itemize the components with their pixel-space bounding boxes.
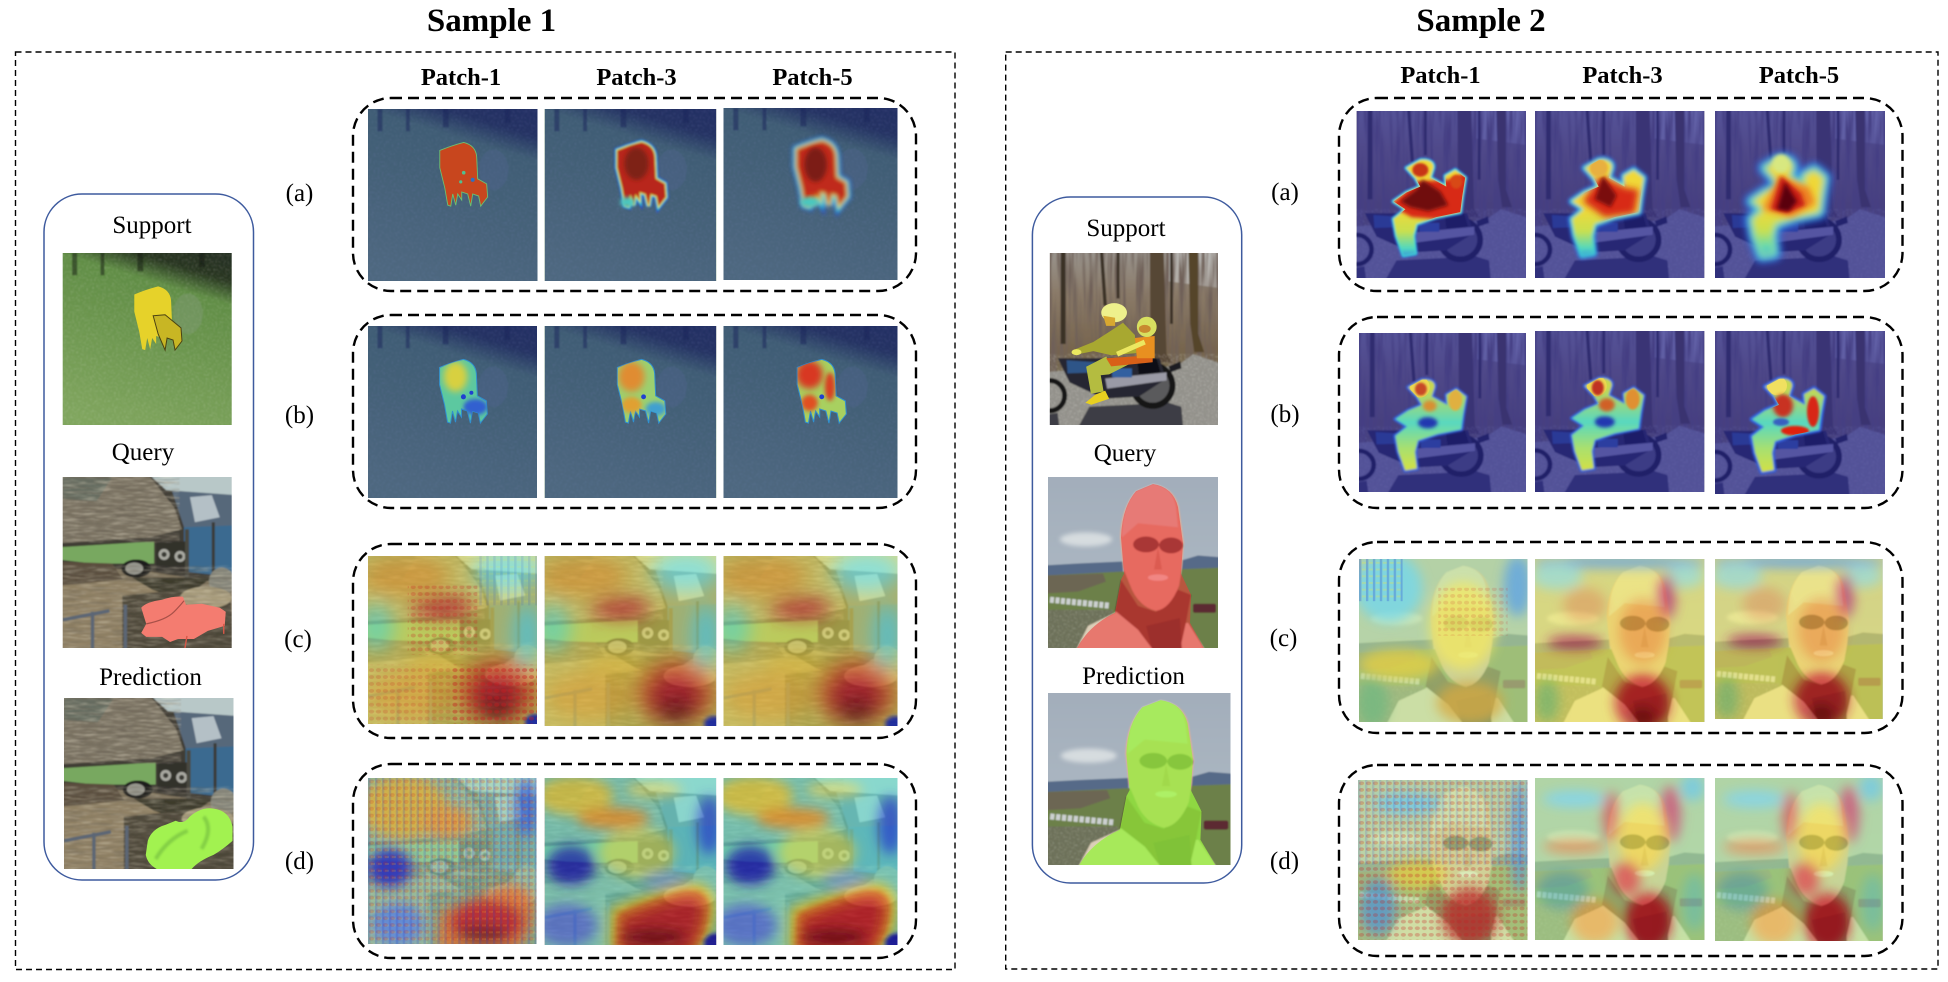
column headings: Sample 1 patches [421,64,853,91]
title: Sample 2: Sample 2 [1416,3,1546,39]
heatmap: b patch-5 [1715,331,1885,494]
row (d): Sample 1 heatmaps [353,764,916,958]
heatmap: d patch-1 [368,778,536,944]
column headings: Sample 1 patches: Patch-3 [596,64,677,91]
label: Prediction: Prediction [1082,663,1185,690]
image: support sheep [62,253,232,425]
label: Query: Query [112,439,175,466]
row label (a): (a) [1271,179,1299,206]
heatmap: d patch-1 [1358,780,1528,940]
row label (c): (c) [284,626,312,653]
label: Support: Support [1086,215,1166,242]
column headings: Sample 1 patches: Patch-1 [421,64,501,91]
column headings: Sample 2 patches [1400,62,1839,89]
row (c): Sample 1 heatmaps [353,544,916,738]
heatmap: d patch-3 [544,778,716,945]
heatmap: a patch-1 [1356,111,1526,278]
heatmap: c patch-5 [1715,559,1883,719]
row (b): Sample 2 heatmaps [1339,317,1902,508]
heatmap: b patch-5 [724,326,898,498]
row (c): Sample 2 heatmaps [1339,542,1902,733]
heatmap: a patch-5 [1715,111,1885,278]
heatmap: d patch-5 [724,778,898,945]
heatmap: c patch-3 [1535,559,1704,722]
row label (b): (b) [1270,401,1300,428]
column headings: Sample 2 patches: Patch-1 [1400,62,1481,89]
label: Support: Support [112,212,192,239]
heatmap: b patch-1 [368,326,537,498]
column headings: Sample 2 patches: Patch-3 [1582,62,1663,89]
heatmap: c patch-3 [544,556,716,726]
heatmap: b patch-3 [1535,331,1704,492]
column headings: Sample 2 patches: Patch-5 [1759,62,1839,89]
heatmap: a patch-3 [1535,111,1704,278]
image: prediction man with green mask [1048,693,1230,865]
heatmap: a patch-3 [544,109,716,281]
heatmap: a patch-5 [724,108,898,280]
image: prediction hay with green mask [64,698,234,869]
heatmap: c patch-1 [368,556,537,724]
heatmap: d patch-5 [1715,778,1883,941]
heatmap: c patch-5 [724,556,898,726]
image: support motorcycle riders [1050,253,1218,425]
heatmap: b patch-3 [544,326,716,498]
panel: Sample 1 [16,52,955,970]
rider masks [1072,303,1157,405]
row label (b): (b) [285,402,314,429]
row label (d): (d) [285,848,314,875]
heatmap: d patch-3 [1535,778,1704,940]
column headings: Sample 1 patches: Patch-5 [772,64,853,91]
title: Sample 1: Sample 1 [427,3,556,39]
row (a): Sample 2 heatmaps [1339,98,1902,291]
label: Prediction: Prediction [99,664,202,691]
panel: Sample 1 inputs [44,194,254,880]
heatmap: c patch-1 [1359,559,1528,722]
image: query hay with red mask [62,477,232,648]
panel: Sample 2 [1006,52,1938,969]
row label (c): (c) [1270,625,1297,652]
label: Query: Query [1094,440,1157,467]
row label (d): (d) [1270,848,1299,875]
heatmap: b patch-1 [1359,333,1526,492]
panel: Sample 2 inputs [1032,197,1242,883]
heatmap: a patch-1 [368,109,538,281]
row label (a): (a) [286,180,313,207]
row (b): Sample 1 heatmaps [353,315,916,508]
image: query man with red mask [1048,477,1218,648]
row (a): Sample 1 heatmaps [353,98,916,291]
row (d): Sample 2 heatmaps [1339,765,1902,956]
